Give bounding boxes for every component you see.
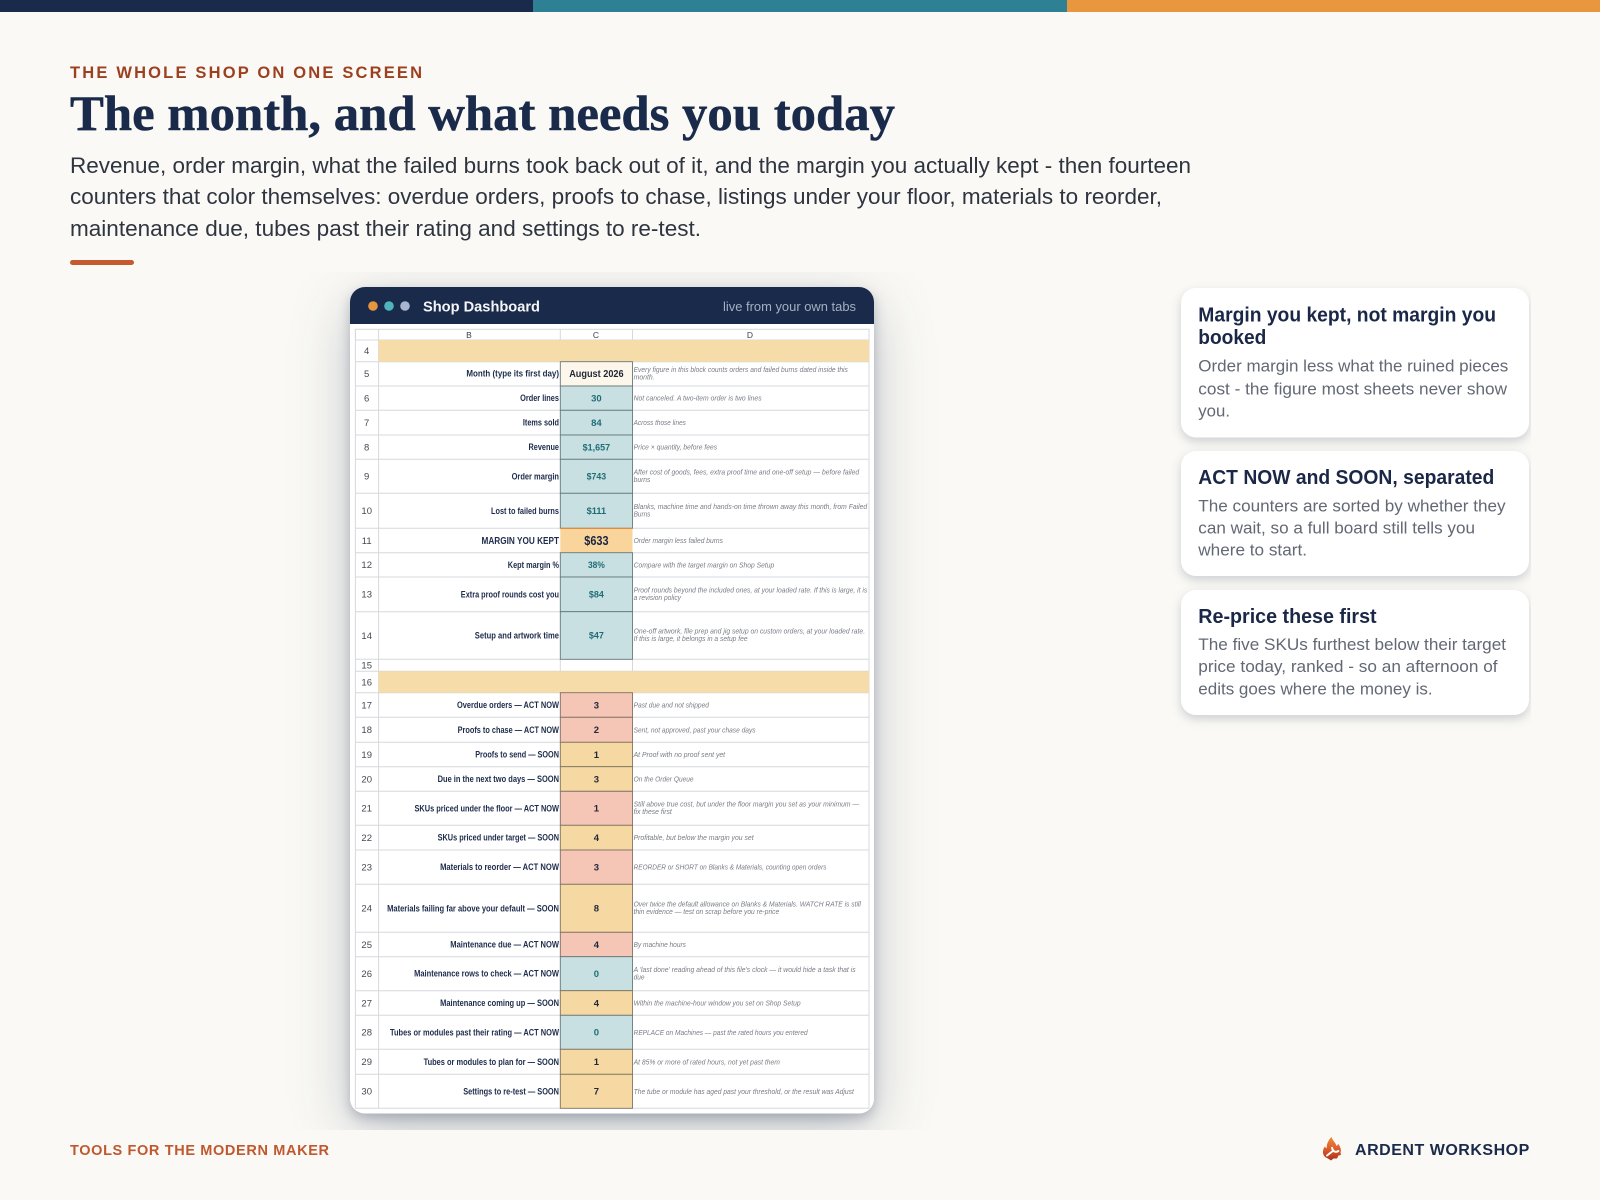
- row 16: section band: [355, 671, 869, 693]
- row 10: lost to failed burns: [355, 493, 869, 528]
- row 4: section band: [355, 340, 869, 362]
- row 21: SKUs under the floor: Still above true cost, but under the floor margin you set as your minimum —: [634, 799, 860, 808]
- row 9: order margin: Order margin: [512, 471, 559, 481]
- row 22: SKUs under target: SKUs priced under target — SOON: [438, 833, 559, 843]
- row 29: tubes to plan for: Tubes or modules to plan for — SOON: [424, 1057, 559, 1067]
- row 25: maintenance due: Maintenance due — ACT NOW: [450, 940, 559, 950]
- row 20: due in the next two days: 20: [361, 774, 372, 785]
- row 10: lost to failed burns: Burns: [634, 510, 651, 519]
- row 8: revenue: Price × quantity, before fees: [634, 443, 717, 452]
- card: margin you kept: Order margin less what the ruined pieces: [1198, 357, 1508, 376]
- row 25: maintenance due: By machine hours: [634, 940, 686, 949]
- row 21: SKUs under the floor: fix these first: [634, 807, 673, 816]
- row 21: SKUs under the floor: [355, 791, 869, 825]
- row 11: margin you kept: $633: [584, 533, 609, 548]
- row 27: maintenance coming up: 27: [361, 998, 372, 1009]
- intro paragraph: maintenance due, tubes past their rating and settings to re-test.: [70, 216, 701, 241]
- row 13: extra proof rounds: 13: [361, 590, 372, 601]
- row 28: tubes past rating: [355, 1015, 869, 1049]
- row 18: proofs to chase: Proofs to chase — ACT NOW: [458, 725, 559, 735]
- icon: flame with wrench: [1323, 1137, 1341, 1160]
- row 9: order margin: burns: [634, 475, 651, 484]
- row 26: maintenance rows to check: [355, 957, 869, 991]
- window title bar: live from your own tabs: [723, 299, 856, 314]
- row 26: maintenance rows to check: 26: [361, 969, 372, 980]
- card: re-price these first: The five SKUs furthest below their target: [1198, 635, 1506, 654]
- row 7: items sold: Items sold: [523, 418, 559, 428]
- row 10: lost to failed burns: Lost to failed burns: [491, 506, 559, 516]
- row 14: setup and artwork time: $47: [589, 631, 604, 642]
- row 24: materials failing above default: [355, 884, 869, 932]
- row 30: settings to re-test: [355, 1074, 869, 1108]
- row 30: settings to re-test: 7: [594, 1087, 599, 1098]
- row 9: order margin: After cost of goods, fees, extra proof time and one-off setup — before failed: [633, 468, 860, 477]
- row 8: revenue: Revenue: [528, 442, 559, 452]
- row 18: proofs to chase: [355, 717, 869, 742]
- row 27: maintenance coming up: 4: [594, 998, 600, 1009]
- row 19: proofs to send: [355, 742, 869, 767]
- row 19: proofs to send: 19: [361, 750, 372, 761]
- row 18: proofs to chase: Sent, not approved, past your chase days: [634, 725, 756, 734]
- card: re-price these first: [1181, 590, 1529, 715]
- row 12: kept margin percent: 38%: [588, 560, 605, 571]
- row 27: maintenance coming up: Maintenance coming up — SOON: [440, 998, 559, 1008]
- row 14: setup and artwork time: 14: [361, 631, 372, 642]
- row 18: proofs to chase: 18: [361, 725, 372, 736]
- row 24: materials failing above default: Over twice the default allowance on Blanks & Materials. WATCH RATE is still: [634, 899, 861, 908]
- row 13: extra proof rounds: [355, 577, 869, 612]
- row 7: items sold: 84: [591, 418, 602, 429]
- row 17: overdue orders: 17: [361, 700, 372, 711]
- accent rule: [70, 260, 134, 265]
- card: margin you kept: Margin you kept, not margin you: [1198, 304, 1496, 326]
- row 22: SKUs under target: Profitable, but below the margin you set: [634, 833, 754, 842]
- row 12: kept margin percent: Compare with the target margin on Shop Setup: [634, 560, 774, 569]
- row 12: kept margin percent: 12: [361, 560, 372, 571]
- footer tagline: TOOLS FOR THE MODERN MAKER: [70, 1143, 330, 1159]
- row 6: order lines: Order lines: [520, 393, 559, 403]
- footer brand: [1323, 1137, 1530, 1160]
- row 5: month: Every figure in this block counts orders and failed burns dated inside this: [634, 365, 848, 374]
- row 19: proofs to send: 1: [594, 750, 600, 761]
- window title bar: Shop Dashboard: [423, 298, 540, 316]
- row 20: due in the next two days: Due in the next two days — SOON: [438, 774, 559, 784]
- row 5: month: [355, 362, 869, 386]
- row 9: order margin: [355, 459, 869, 493]
- card: re-price these first: Re-price these first: [1198, 606, 1377, 628]
- row 21: SKUs under the floor: 1: [594, 804, 600, 815]
- row 26: maintenance rows to check: due: [634, 972, 644, 982]
- row 6: order lines: 30: [591, 393, 602, 404]
- row 27: maintenance coming up: [355, 991, 869, 1015]
- row 6: order lines: Not canceled. A two-item order is two lines: [634, 394, 762, 403]
- row 23: materials to reorder: REORDER or SHORT on Blanks & Materials, counting open orders: [634, 863, 827, 872]
- row 9: order margin: $743: [587, 472, 606, 483]
- window title bar: [350, 287, 874, 324]
- row 7: items sold: 7: [364, 418, 369, 429]
- row 11: margin you kept: [355, 528, 869, 553]
- card: act now and soon: can wait, so a full board still tells you: [1198, 518, 1475, 537]
- row 29: tubes to plan for: [355, 1049, 869, 1074]
- row 11: margin you kept: 11: [362, 536, 372, 547]
- row 10: lost to failed burns: Blanks, machine time and hands-on time thrown away this month, from Failed: [634, 502, 868, 511]
- row 6: order lines: [355, 386, 869, 410]
- row 30: settings to re-test: Settings to re-test — SOON: [463, 1086, 559, 1096]
- card: margin you kept: booked: [1198, 327, 1266, 349]
- panel: spreadsheet window: [350, 287, 874, 1114]
- row 22: SKUs under target: 4: [594, 833, 600, 844]
- row 9: order margin: 9: [364, 472, 369, 483]
- row 24: materials failing above default: 24: [361, 904, 372, 915]
- row 7: items sold: Across those lines: [633, 418, 686, 427]
- row 14: setup and artwork time: [355, 612, 869, 659]
- card: re-price these first: price today, ranked - so an afternoon of: [1198, 657, 1498, 676]
- row 19: proofs to send: At Proof with no proof sent yet: [633, 750, 726, 759]
- row 30: settings to re-test: The tube or module has aged past your threshold, or the result was Adjust: [634, 1087, 855, 1096]
- row 21: SKUs under the floor: SKUs priced under the floor — ACT NOW: [414, 803, 559, 813]
- row 12: kept margin percent: Kept margin %: [508, 560, 559, 570]
- spreadsheet column headers: D: [747, 330, 753, 340]
- row 23: materials to reorder: 23: [361, 862, 372, 873]
- row 14: setup and artwork time: One-off artwork, file prep and jig setup on custom orders, at your loaded rate.: [634, 626, 865, 636]
- row 8: revenue: [355, 435, 869, 459]
- row 29: tubes to plan for: 1: [594, 1057, 600, 1068]
- row 10: lost to failed burns: 10: [361, 506, 372, 517]
- row 14: setup and artwork time: If this is large, it belongs in a setup fee: [634, 634, 748, 643]
- row 10: lost to failed burns: $111: [587, 506, 607, 517]
- eyebrow: THE WHOLE SHOP ON ONE SCREEN: [70, 64, 422, 82]
- row 8: revenue: 8: [364, 442, 369, 453]
- row 26: maintenance rows to check: 0: [594, 969, 599, 980]
- row 5: month: Month (type its first day): [466, 369, 559, 379]
- row 24: materials failing above default: 8: [594, 904, 599, 915]
- row 11: margin you kept: Order margin less failed burns: [634, 536, 723, 545]
- footer brand: ARDENT WORKSHOP: [1355, 1142, 1530, 1159]
- row 26: maintenance rows to check: Maintenance rows to check — ACT NOW: [414, 969, 559, 979]
- row 20: due in the next two days: [355, 767, 869, 791]
- row 21: SKUs under the floor: 21: [361, 804, 372, 815]
- spreadsheet column headers: C: [593, 330, 599, 340]
- row 13: extra proof rounds: $84: [589, 590, 605, 601]
- row 19: proofs to send: Proofs to send — SOON: [475, 750, 559, 760]
- title: The month, and what needs you today: [70, 85, 895, 141]
- row 22: SKUs under target: 22: [361, 833, 372, 844]
- row 25: maintenance due: 25: [361, 940, 372, 951]
- row 26: maintenance rows to check: A 'last done' reading ahead of this file's clock — it would hide a task that is: [633, 965, 856, 974]
- row 13: extra proof rounds: a revision policy: [634, 593, 682, 602]
- row 13: extra proof rounds: Proof rounds beyond the included ones, at your loaded rate. If this is large, it is: [634, 586, 867, 595]
- card: act now and soon: where to start.: [1197, 540, 1307, 559]
- row 17: overdue orders: Overdue orders — ACT NOW: [457, 700, 559, 710]
- intro paragraph: Revenue, order margin, what the failed burns took back out of it, and the margin you actually kept - then fourteen: [70, 153, 1191, 178]
- row 24: materials failing above default: Materials failing far above your default — SOON: [387, 903, 559, 913]
- row 30: settings to re-test: 30: [361, 1087, 372, 1098]
- row 29: tubes to plan for: At 85% or more of rated hours, not yet past them: [633, 1057, 780, 1066]
- top colour bar: [0, 0, 1600, 12]
- row 11: margin you kept: MARGIN YOU KEPT: [482, 536, 559, 547]
- row 23: materials to reorder: Materials to reorder — ACT NOW: [440, 862, 559, 872]
- row 8: revenue: $1,657: [583, 442, 610, 453]
- row 23: materials to reorder: [355, 850, 869, 884]
- row 25: maintenance due: [355, 932, 869, 957]
- card: act now and soon: ACT NOW and SOON, separated: [1198, 467, 1494, 489]
- row 28: tubes past rating: REPLACE on Machines — past the rated hours you entered: [634, 1028, 808, 1037]
- spreadsheet column headers: [355, 329, 869, 1108]
- row 12: kept margin percent: [355, 553, 869, 577]
- row 5: month: month.: [634, 372, 655, 381]
- row 13: extra proof rounds: Extra proof rounds cost you: [461, 589, 559, 599]
- row 23: materials to reorder: 3: [594, 862, 599, 873]
- intro paragraph: [70, 153, 1191, 241]
- row 27: maintenance coming up: Within the machine-hour window you set on Shop Setup: [634, 998, 801, 1008]
- card: act now and soon: The counters are sorted by whether they: [1198, 496, 1506, 515]
- card: re-price these first: edits goes where the money is.: [1198, 679, 1433, 698]
- row 28: tubes past rating: 0: [594, 1028, 599, 1039]
- row 17: overdue orders: Past due and not shipped: [634, 700, 710, 710]
- row 20: due in the next two days: 3: [594, 774, 599, 785]
- row 5: month: 5: [364, 369, 369, 380]
- card: margin you kept: you.: [1198, 402, 1230, 421]
- card: act now and soon: [1181, 451, 1529, 576]
- row 4: section band: 4: [364, 346, 369, 357]
- row 20: due in the next two days: On the Order Queue: [634, 774, 694, 784]
- row 5: month: August 2026: [569, 369, 624, 380]
- row 29: tubes to plan for: 29: [361, 1057, 372, 1068]
- row 14: setup and artwork time: Setup and artwork time: [475, 630, 559, 640]
- row 25: maintenance due: 4: [594, 940, 600, 951]
- row 18: proofs to chase: 2: [594, 725, 599, 736]
- panel: callout cards: [1181, 288, 1529, 715]
- card: margin you kept: [1181, 288, 1529, 438]
- intro paragraph: counters that color themselves: overdue orders, proofs to chase, listings under your floor, materials to reorder,: [70, 184, 1162, 209]
- spreadsheet column headers: B: [466, 330, 472, 340]
- row 22: SKUs under target: [355, 825, 869, 850]
- row 16: section band: 16: [361, 677, 372, 688]
- row 17: overdue orders: [355, 693, 869, 717]
- row 6: order lines: 6: [364, 393, 369, 404]
- row 28: tubes past rating: Tubes or modules past their rating — ACT NOW: [390, 1027, 559, 1037]
- row 24: materials failing above default: thin evidence — test on scrap before you re-price: [634, 907, 779, 916]
- row 7: items sold: [355, 410, 869, 435]
- row 17: overdue orders: 3: [594, 700, 599, 711]
- card: margin you kept: cost - the figure most sheets never show: [1198, 380, 1508, 399]
- row 28: tubes past rating: 28: [361, 1028, 372, 1039]
- row 15: spacer: 15: [361, 661, 372, 672]
